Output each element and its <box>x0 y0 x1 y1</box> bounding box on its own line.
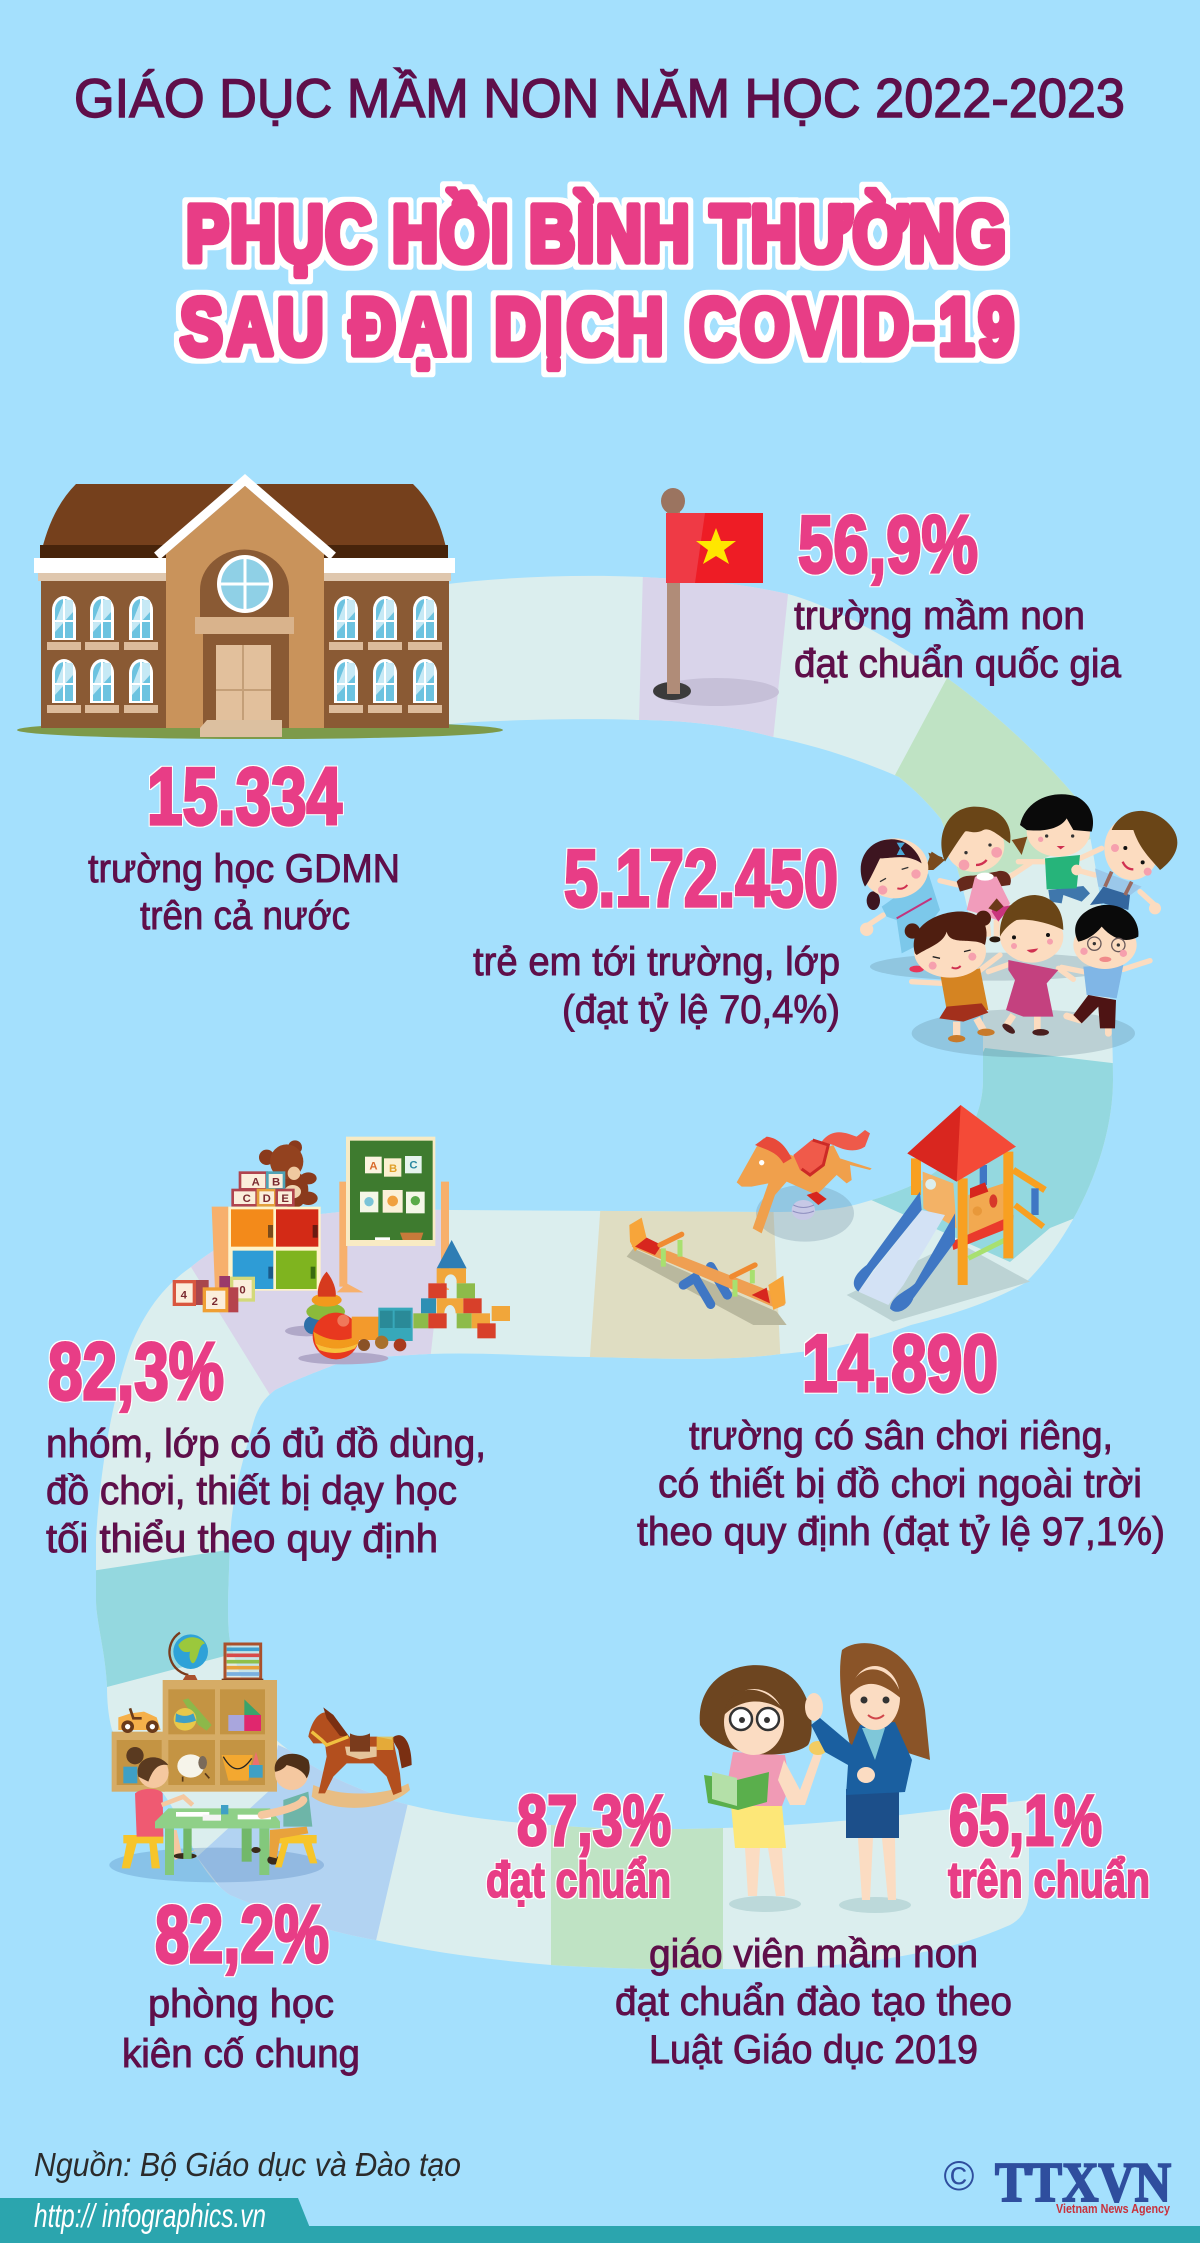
text: teachers description <box>615 1932 1012 2072</box>
alphabet blocks: B <box>272 1176 280 1188</box>
stat: 56,9% national standard: 56,9% <box>798 500 978 590</box>
stat: 82,2% solid classrooms: kiên cố chung <box>122 2032 360 2076</box>
child: boy with glasses <box>1062 905 1150 1033</box>
child: girl in magenta <box>988 895 1073 1036</box>
stat: 14.890 playgrounds: theo quy định (đạt tỷ lệ 97,1%) <box>637 1510 1165 1554</box>
seesaw <box>627 1218 787 1325</box>
boy drawing <box>251 1754 317 1867</box>
stat: 87,3% meet standard: 87,3% <box>517 1782 671 1861</box>
stat: 56,9% national standard <box>794 500 1122 686</box>
subtitle <box>180 189 1014 372</box>
number blocks: 4 <box>181 1289 188 1301</box>
number blocks <box>173 1276 255 1312</box>
stat: 82,3% equipment: nhóm, lớp có đủ đồ dùng, <box>46 1422 486 1466</box>
rocking horse <box>308 1707 412 1808</box>
subtitle: SAU ĐẠI DỊCH COVID-19 <box>180 282 1014 372</box>
stat: 82,2% solid classrooms: 82,2% <box>155 1890 329 1980</box>
wooden shelves <box>112 1680 277 1792</box>
stat: 87,3% meet standard: đạt chuẩn <box>486 1852 671 1908</box>
stacking toy and ball <box>285 1272 388 1364</box>
stat: 65,1% above standard <box>948 1782 1150 1908</box>
teddy bear <box>259 1140 318 1208</box>
stat: 5.172.450 children: 5.172.450 <box>564 834 838 924</box>
block castle <box>413 1240 510 1338</box>
text: teachers description: giáo viên mầm non <box>649 1932 978 1976</box>
footer bar: http:// infographics.vn <box>34 2197 266 2234</box>
easel chalkboard <box>337 1137 445 1292</box>
logo: TTXVN: © <box>944 2152 975 2199</box>
stat: 82,3% equipment: tối thiểu theo quy định <box>46 1517 438 1561</box>
child: girl in pink apron <box>928 807 1030 942</box>
easel chalkboard: A <box>369 1160 378 1172</box>
winding road <box>96 576 1113 1970</box>
globe <box>169 1633 208 1682</box>
alphabet blocks: D <box>263 1193 271 1205</box>
stat: 15.334 schools <box>88 752 400 938</box>
stat: 82,2% solid classrooms: phòng học <box>148 1982 334 2026</box>
logo: TTXVN: Vietnam News Agency <box>1056 2201 1171 2216</box>
icon: school building <box>17 480 503 739</box>
subtitle: PHỤC HỒI BÌNH THƯỜNG <box>186 189 1006 279</box>
stat: 5.172.450 children <box>473 834 840 1032</box>
alphabet blocks <box>233 1173 293 1205</box>
logo: TTXVN: TTXVN <box>995 2152 1171 2214</box>
stat: 82,3% equipment: đồ chơi, thiết bị dạy học <box>46 1469 457 1513</box>
stat: 65,1% above standard: trên chuẩn <box>948 1852 1150 1908</box>
stat: 82,3% equipment: 82,3% <box>48 1327 224 1417</box>
stat: 14.890 playgrounds: có thiết bị đồ chơi ngoài trời <box>658 1462 1142 1506</box>
child: bun girl in orange <box>905 911 1000 1042</box>
girl drawing <box>122 1747 197 1868</box>
alphabet blocks: C <box>243 1193 251 1205</box>
child: boy in overalls <box>1071 811 1177 914</box>
icon: teacher in blue suit <box>805 1643 930 1913</box>
easel chalkboard: C <box>409 1160 418 1172</box>
play tower and slide <box>847 1105 1045 1322</box>
number blocks: 2 <box>212 1296 218 1308</box>
abacus <box>222 1644 263 1681</box>
alphabet blocks: A <box>252 1176 260 1188</box>
stat: 14.890 playgrounds: trường có sân chơi riêng, <box>689 1414 1113 1458</box>
table <box>155 1805 280 1875</box>
icon: flag <box>653 488 779 706</box>
stat: 87,3% meet standard <box>486 1782 671 1908</box>
spring horse <box>737 1130 872 1242</box>
icon: classroom with children <box>109 1633 412 1882</box>
cubby shelf <box>212 1207 321 1291</box>
toy car <box>118 1708 161 1733</box>
toy truck <box>352 1308 413 1351</box>
title: GIÁO DỤC MẦM NON NĂM HỌC 2022-2023 <box>74 67 1125 129</box>
icon: teacher with glasses <box>700 1665 827 1912</box>
child: left girl <box>860 838 945 972</box>
footer bar <box>0 2197 1200 2243</box>
stat: 56,9% national standard: trường mầm non <box>794 594 1085 638</box>
stat: 14.890 playgrounds <box>637 1319 1165 1554</box>
stat: 65,1% above standard: 65,1% <box>949 1782 1102 1861</box>
stat: 15.334 schools: 15.334 <box>147 752 342 842</box>
alphabet blocks: E <box>281 1193 289 1205</box>
stat: 5.172.450 children: trẻ em tới trường, lớp <box>473 940 840 984</box>
easel chalkboard: B <box>389 1163 397 1175</box>
icon: children <box>860 794 1177 1057</box>
source line: Nguồn: Bộ Giáo dục và Đào tạo <box>34 2146 461 2183</box>
text: teachers description: đạt chuẩn đào tạo theo <box>615 1980 1012 2024</box>
number blocks: 0 <box>239 1284 246 1296</box>
stat: 15.334 schools: trường học GDMN <box>88 847 400 891</box>
stat: 5.172.450 children: (đạt tỷ lệ 70,4%) <box>562 988 840 1032</box>
stat: 82,2% solid classrooms <box>122 1890 360 2076</box>
text: teachers description: Luật Giáo dục 2019 <box>649 2028 978 2072</box>
stat: 56,9% national standard: đạt chuẩn quốc gia <box>794 642 1122 686</box>
icon: classroom shelf and toys <box>173 1137 510 1364</box>
stat: 15.334 schools: trên cả nước <box>140 894 350 938</box>
logo: TTXVN <box>944 2152 1171 2216</box>
stat: 14.890 playgrounds: 14.890 <box>802 1319 998 1409</box>
icon: playground <box>627 1105 1045 1325</box>
child: boy in green <box>1018 794 1102 903</box>
stat: 82,3% equipment <box>46 1327 486 1561</box>
